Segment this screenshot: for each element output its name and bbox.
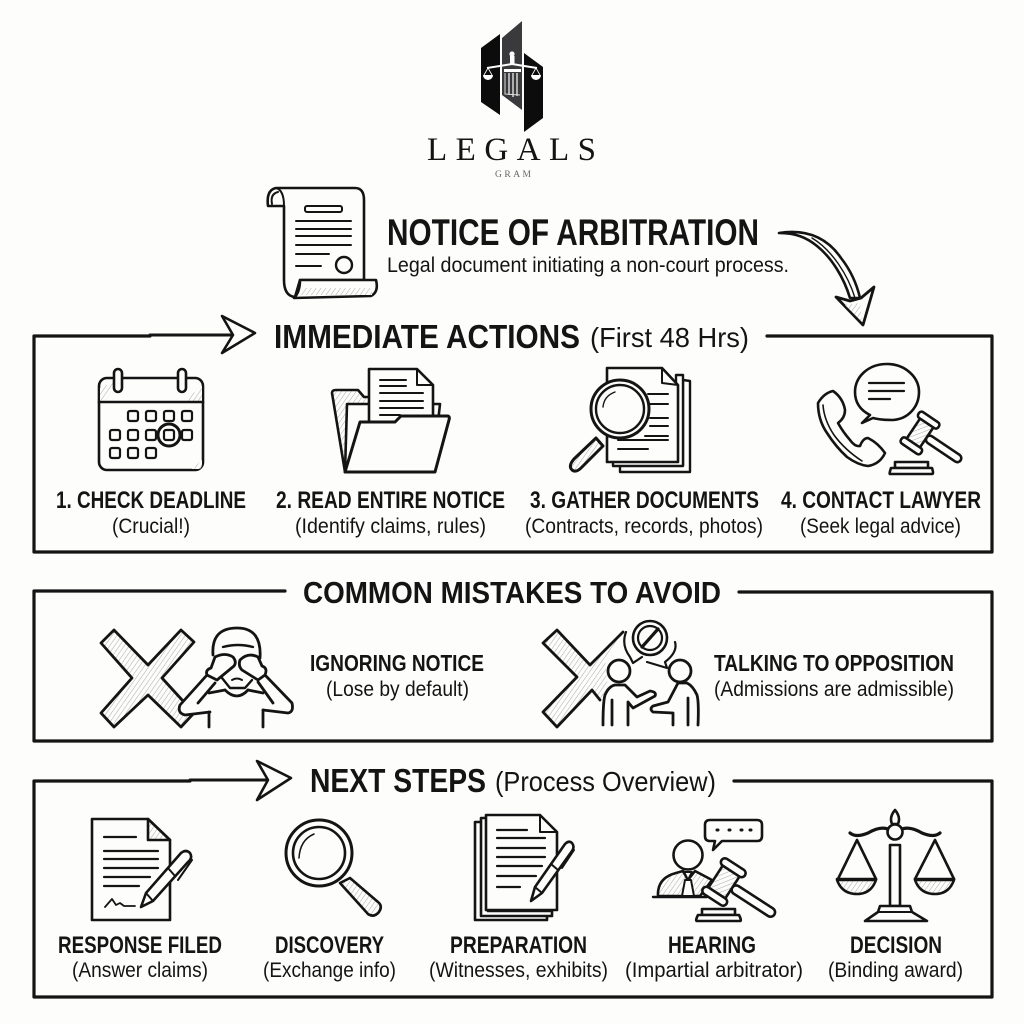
subheading: notice description: Legal document initiating a non-court process.	[387, 254, 789, 277]
icon: X mark and person covering eyes	[101, 628, 292, 727]
label: check deadline: 1. CHECK DEADLINE	[56, 487, 246, 514]
logo subtext: GRAM	[495, 170, 532, 180]
label: gather documents	[525, 487, 763, 538]
icon: magnifier over documents	[570, 368, 690, 472]
label: decision: DECISION	[850, 932, 942, 959]
label: discovery: DISCOVERY	[275, 932, 384, 959]
label: ignoring notice: IGNORING NOTICE	[310, 650, 484, 676]
label: discovery: (Exchange info)	[263, 958, 396, 982]
icon: scales of justice	[837, 810, 954, 921]
icon: phone, speech bubble and gavel	[818, 364, 971, 476]
label: decision	[828, 932, 963, 982]
icon: arbitrator with gavel	[653, 820, 786, 932]
label: check deadline: (Crucial!)	[112, 514, 190, 538]
label: response filed: (Answer claims)	[72, 958, 208, 982]
heading note: (First 48 Hrs)	[590, 322, 749, 353]
label: preparation: PREPARATION	[450, 932, 587, 959]
icon: magnifying glass	[286, 820, 381, 916]
panel: common mistakes	[34, 575, 992, 741]
logo emblem	[481, 21, 543, 132]
label: contact lawyer	[781, 487, 981, 538]
icon: calendar	[99, 369, 203, 470]
label: talking to opposition: (Admissions are admissible)	[714, 678, 954, 701]
arrow: into panel	[150, 316, 255, 353]
label: contact lawyer: (Seek legal advice)	[800, 514, 961, 538]
label: preparation	[429, 932, 608, 982]
label: check deadline	[56, 487, 246, 538]
heading: next steps: NEXT STEPS	[310, 762, 486, 799]
label: hearing: (Impartial arbitrator)	[625, 958, 803, 982]
label: read entire notice	[276, 487, 505, 538]
arrow: into panel	[190, 761, 291, 800]
heading note: (Process Overview)	[495, 766, 716, 797]
panel frame	[34, 781, 992, 997]
panel frame	[34, 336, 992, 552]
heading: immediate actions: IMMEDIATE ACTIONS	[274, 318, 580, 355]
icon: X mark with two people talking	[543, 621, 698, 727]
logo wordmark: LEGALS	[427, 132, 596, 168]
panel: next steps	[34, 761, 992, 997]
panel frame	[34, 591, 992, 741]
icon: document stack and pen	[475, 815, 574, 920]
label: ignoring notice: (Lose by default)	[326, 678, 469, 701]
heading: notice of arbitration: NOTICE OF ARBITRATION	[387, 212, 759, 253]
label: decision: (Binding award)	[828, 958, 963, 982]
label: talking to opposition	[714, 650, 954, 701]
icon: scroll	[268, 188, 377, 298]
arrow: notice to actions	[779, 232, 874, 325]
icon: signed document and pen	[92, 819, 192, 920]
logo	[427, 21, 596, 180]
label: discovery	[263, 932, 396, 982]
label: hearing	[625, 932, 803, 982]
label: read entire notice: 2. READ ENTIRE NOTICE	[276, 487, 505, 514]
label: read entire notice: (Identify claims, rules)	[295, 514, 486, 538]
panel: immediate actions	[34, 316, 992, 552]
label: response filed	[58, 932, 222, 982]
label: talking to opposition: TALKING TO OPPOSITION	[714, 650, 954, 676]
label: response filed: RESPONSE FILED	[58, 932, 222, 959]
heading: common mistakes: COMMON MISTAKES TO AVOID	[303, 575, 721, 610]
label: gather documents: 3. GATHER DOCUMENTS	[530, 487, 759, 514]
label: ignoring notice	[310, 650, 484, 701]
label: preparation: (Witnesses, exhibits)	[429, 958, 608, 982]
label: hearing: HEARING	[668, 932, 756, 959]
icon: folder	[332, 369, 449, 472]
label: gather documents: (Contracts, records, photos)	[525, 514, 763, 538]
